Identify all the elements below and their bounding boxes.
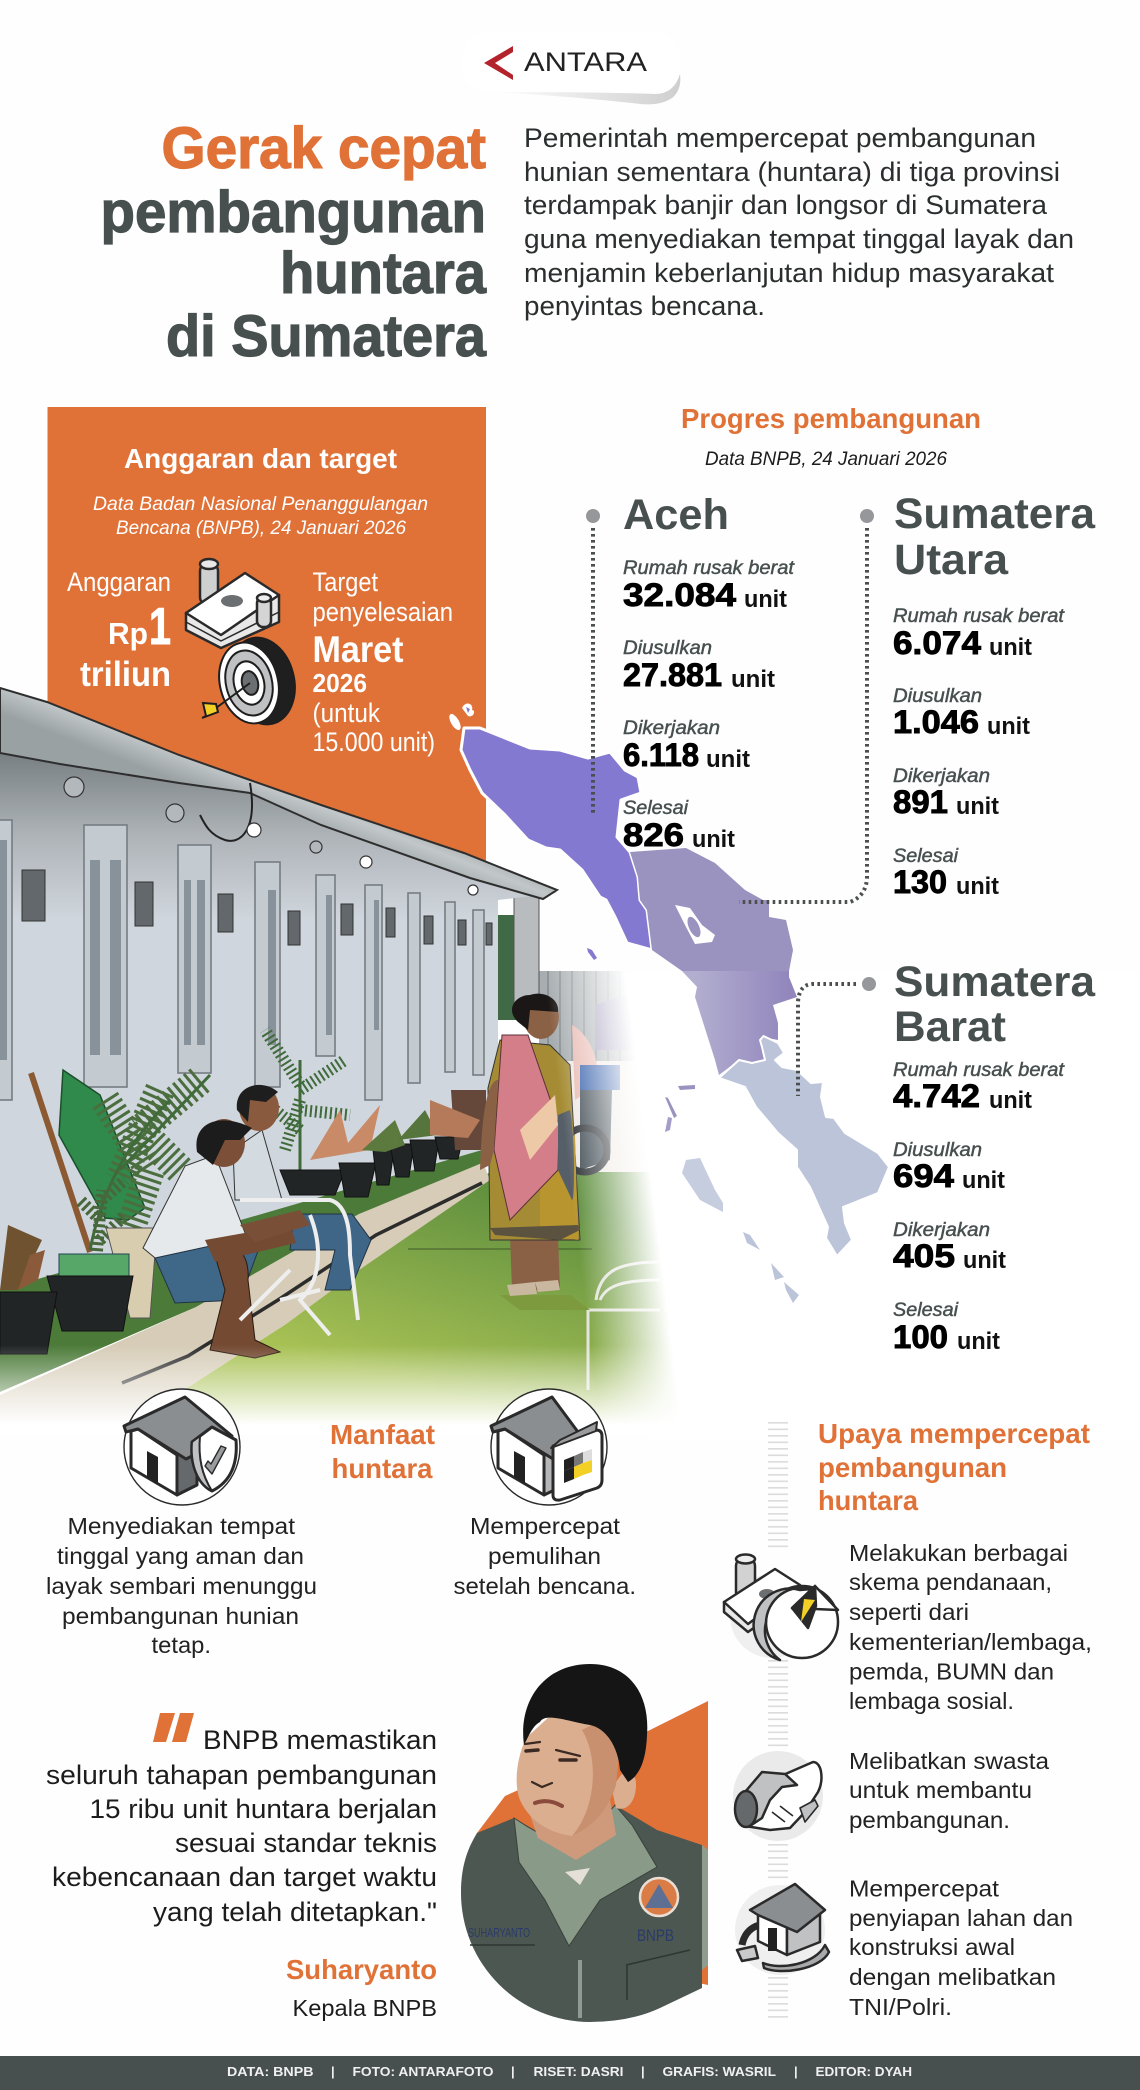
map of Sumatera — [447, 704, 889, 1303]
budget figure: Rp — [108, 616, 148, 651]
stats: Aceh: 826 — [623, 817, 684, 853]
stats: Sumatera Barat: unit — [963, 1247, 1006, 1274]
text: benefit two — [454, 1513, 636, 1599]
heading: upaya mempercepat — [818, 1418, 1090, 1516]
quote attribution: Kepala BNPB — [292, 1995, 437, 2021]
logo: ANTARA: ANTARA — [524, 47, 647, 77]
wall — [0, 745, 557, 1300]
face — [517, 1716, 636, 1836]
intro text — [524, 123, 1074, 321]
stats: Sumatera Utara: 6.074 — [893, 625, 981, 661]
stats: Sumatera Barat: 4.742 — [893, 1078, 980, 1114]
text: funding schemes: seperti dari — [849, 1599, 969, 1625]
stats: Aceh: Diusulkan — [623, 638, 712, 659]
BNPB badge — [640, 1878, 678, 1916]
white chair — [240, 1200, 358, 1335]
icon: funding money and pie — [724, 1554, 838, 1660]
text: land preparation: Mempercepat — [849, 1876, 999, 1902]
icon: house with shield — [124, 1389, 240, 1505]
hair — [523, 1664, 647, 1782]
stats: Sumatera Utara: unit — [989, 634, 1032, 661]
portrait: Suharyanto, Kepala BNPB — [461, 1664, 708, 2022]
subtitle: source: Bencana (BNPB), 24 Januari 2026 — [116, 518, 406, 539]
stats: Sumatera Barat: unit — [989, 1087, 1032, 1114]
title: huntara — [280, 241, 487, 306]
timeline ladder — [768, 1422, 788, 2018]
concrete strip — [0, 1160, 490, 1430]
BNPB label: BNPB — [637, 1926, 674, 1945]
text: benefit one: tetap. — [152, 1632, 211, 1658]
footer credits: | — [511, 2064, 515, 2079]
vest pockets — [470, 1945, 690, 2000]
budget figure — [67, 567, 171, 694]
column — [514, 890, 539, 1010]
stats: Sumatera Utara: Sumatera — [894, 490, 1096, 538]
stats: Sumatera Utara: Dikerjakan — [893, 766, 990, 787]
completion target: Maret — [312, 629, 404, 670]
heading: manfaat huntara: Manfaat — [330, 1419, 435, 1450]
text: funding schemes: lembaga sosial. — [849, 1688, 1014, 1714]
text: private sector: pembangunan. — [849, 1807, 1010, 1833]
footer credits: GRAFIS: WASRIL — [662, 2064, 776, 2079]
photo fade to white — [0, 971, 1140, 1441]
stats: Aceh: unit — [692, 826, 735, 853]
stats: Aceh: unit — [744, 586, 787, 613]
stats: Sumatera Barat: 100 — [893, 1319, 948, 1355]
connector: Sumatera Barat — [798, 977, 876, 1096]
sleeve — [702, 1845, 708, 1970]
windows and doors — [0, 820, 484, 1100]
text: benefit one: Menyediakan tempat — [68, 1513, 295, 1539]
heading: upaya mempercepat: Upaya mempercepat — [818, 1418, 1090, 1449]
neck — [530, 1800, 616, 1860]
text: funding schemes: skema pendanaan, — [849, 1569, 1052, 1595]
footer credits: | — [794, 2064, 798, 2079]
text: land preparation: penyiapan lahan dan — [849, 1905, 1073, 1931]
stats: Sumatera Barat: Dikerjakan — [893, 1220, 990, 1241]
map: Aceh province — [447, 704, 652, 960]
subtitle: source — [93, 494, 428, 539]
quote text: seluruh tahapan pembangunan — [46, 1760, 437, 1790]
completion target — [312, 567, 453, 757]
budget figure: 1 — [149, 598, 171, 656]
second chair at the right — [588, 1262, 660, 1390]
logo: ANTARA — [462, 32, 680, 104]
quote text: 15 ribu unit huntara berjalan — [90, 1794, 437, 1824]
lawn — [122, 1172, 690, 1430]
icon: house with calendar — [491, 1389, 607, 1505]
stats: Sumatera Utara: Selesai — [893, 846, 959, 867]
lamps — [64, 777, 478, 895]
text: benefit one — [46, 1513, 317, 1658]
broom and green bin — [31, 1070, 145, 1252]
stats: Aceh: 32.084 — [623, 577, 736, 613]
completion target: penyelesaian — [312, 597, 453, 627]
motorbike — [563, 1025, 620, 1172]
panel: anggaran dan target — [48, 407, 486, 877]
icon: house with construction ring — [735, 1884, 829, 1975]
budget figure: Anggaran — [67, 567, 171, 597]
heading: upaya mempercepat: pembangunan — [818, 1452, 1007, 1483]
stats: Aceh: 6.118 — [623, 737, 699, 773]
text: land preparation: dengan melibatkan — [849, 1964, 1056, 1990]
heading: progres pembangunan — [681, 403, 981, 470]
text: benefit two: setelah bencana. — [454, 1573, 636, 1599]
map: Sumatera Utara province — [630, 848, 797, 1132]
connector: Sumatera Utara — [739, 509, 874, 902]
stats: Sumatera Barat: 694 — [893, 1158, 954, 1194]
stats: Sumatera Utara: unit — [956, 793, 999, 820]
facial features — [525, 1742, 580, 1806]
text: benefit two: pemulihan — [488, 1543, 601, 1569]
footer credits: | — [641, 2064, 645, 2079]
stats: Aceh: Selesai — [623, 798, 689, 819]
text: funding schemes: kementerian/lembaga, — [849, 1629, 1092, 1655]
pots — [0, 1137, 463, 1354]
shirt — [514, 1805, 657, 1946]
text: benefit one: pembangunan hunian — [62, 1603, 299, 1629]
man in front — [143, 1119, 310, 1358]
footer credits — [0, 2056, 1140, 2090]
quote text: yang telah ditetapkan." — [153, 1897, 437, 1927]
connector: Aceh — [586, 509, 600, 816]
stats: Aceh: Dikerjakan — [623, 718, 720, 739]
stats: Aceh: Aceh — [623, 491, 729, 539]
standing woman — [480, 994, 590, 1310]
budget figure: triliun — [80, 655, 171, 694]
completion target: 2026 — [312, 668, 367, 698]
text: private sector — [849, 1748, 1050, 1833]
background fence — [539, 971, 670, 1176]
text: funding schemes: Melakukan berbagai — [849, 1540, 1068, 1566]
stats: Sumatera Utara: 891 — [893, 784, 948, 820]
stats: Sumatera Barat: unit — [957, 1328, 1000, 1355]
completion target: 15.000 unit) — [312, 727, 435, 757]
text: land preparation — [849, 1876, 1073, 2020]
stats: Sumatera Utara: unit — [956, 873, 999, 900]
intro text: guna menyediakan tempat tinggal layak dan — [524, 224, 1074, 254]
palm and small plants — [80, 1030, 350, 1275]
electricity meters — [22, 870, 492, 945]
text: benefit one: tinggal yang aman dan — [57, 1543, 304, 1569]
text: land preparation: TNI/Polri. — [849, 1994, 952, 2020]
stats: Aceh: 27.881 — [623, 657, 722, 693]
photo illustration: huntara housing with residents — [0, 688, 690, 1430]
stats: Sumatera Utara: Rumah rusak berat — [893, 606, 1065, 627]
stats: Sumatera Barat: 405 — [893, 1238, 955, 1274]
stats: Sumatera Utara: Diusulkan — [893, 686, 982, 707]
text: funding schemes: pemda, BUMN dan — [849, 1658, 1054, 1684]
footer credits: | — [331, 2064, 335, 2079]
stats: Sumatera Utara: unit — [987, 713, 1030, 740]
intro text: menjamin keberlanjutan hidup masyarakat — [524, 258, 1055, 288]
subtitle: source: Data Badan Nasional Penanggulangan — [93, 494, 428, 515]
text: benefit one: layak sembari menunggu — [46, 1573, 317, 1599]
intro text: Pemerintah mempercepat pembangunan — [524, 123, 1036, 153]
stats: Sumatera Utara: 130 — [893, 864, 947, 900]
stats: Sumatera Utara: 1.046 — [893, 704, 979, 740]
heading: manfaat huntara: huntara — [332, 1453, 433, 1484]
stats: Sumatera Barat: Diusulkan — [893, 1140, 982, 1161]
stats: Sumatera Barat — [893, 958, 1096, 1355]
stats: Aceh: Rumah rusak berat — [623, 558, 795, 579]
icon: target with arrow — [202, 631, 304, 731]
stats: Aceh: unit — [731, 666, 775, 693]
heading: progres pembangunan: Data BNPB, 24 Januari 2026 — [705, 449, 947, 470]
title — [100, 116, 487, 369]
icon: handshake — [733, 1751, 823, 1841]
map: Sumatera Barat province — [682, 1036, 889, 1303]
stats: Sumatera Barat: unit — [962, 1167, 1005, 1194]
text: benefit two: Mempercepat — [470, 1513, 620, 1539]
stats: Sumatera Utara: Utara — [894, 536, 1009, 584]
footer credits: FOTO: ANTARAFOTO — [352, 2064, 494, 2079]
quote text — [46, 1725, 437, 1927]
quote attribution — [286, 1954, 437, 2021]
green background — [498, 915, 518, 1020]
footer credits: RISET: DASRI — [534, 2064, 624, 2079]
text: private sector: Melibatkan swasta — [849, 1748, 1050, 1774]
cable — [200, 783, 252, 841]
sack and basket — [59, 1228, 157, 1318]
stats: Sumatera Utara — [893, 490, 1096, 900]
stats: Sumatera Barat: Barat — [894, 1003, 1006, 1051]
quote mark — [153, 1713, 194, 1742]
heading: upaya mempercepat: huntara — [818, 1485, 918, 1516]
title: pembangunan — [100, 180, 486, 245]
title: Gerak cepat — [162, 116, 486, 181]
footer credits: DATA: BNPB — [227, 2064, 314, 2079]
completion target: (untuk — [312, 698, 380, 728]
zipper — [578, 1960, 582, 2018]
orange backdrop — [470, 1701, 708, 1985]
vest — [461, 1805, 702, 2022]
heading: anggaran dan target: Anggaran dan target — [124, 443, 397, 474]
heading: manfaat huntara — [330, 1419, 435, 1484]
completion target: Target — [312, 567, 378, 597]
icon: money stack — [186, 559, 279, 648]
grass strip — [0, 1150, 482, 1392]
footer credits: EDITOR: DYAH — [816, 2064, 912, 2079]
quote text: sesuai standar teknis — [175, 1828, 437, 1858]
quote text: kebencanaan dan target waktu — [52, 1862, 437, 1892]
intro text: terdampak banjir dan longsor di Sumatera — [524, 190, 1048, 220]
stats: Aceh: unit — [706, 746, 750, 773]
intro text: hunian sementara (huntara) di tiga provinsi — [524, 157, 1060, 187]
text: private sector: untuk membantu — [849, 1777, 1032, 1803]
foliage on pots — [0, 1100, 480, 1290]
text: land preparation: konstruksi awal — [849, 1934, 1015, 1960]
roof — [0, 688, 557, 899]
stats: Sumatera Barat: Rumah rusak berat — [893, 1060, 1065, 1081]
text: funding schemes — [849, 1540, 1092, 1714]
intro text: penyintas bencana. — [524, 291, 765, 321]
quote attribution: Suharyanto — [286, 1954, 437, 1985]
stats: Aceh — [623, 491, 795, 853]
title: di Sumatera — [166, 304, 487, 369]
stats: Sumatera Barat: Selesai — [893, 1300, 959, 1321]
heading: progres pembangunan: Progres pembangunan — [681, 403, 981, 434]
name patch: SUHARYANTO — [468, 1925, 530, 1940]
stats: Sumatera Barat: Sumatera — [894, 958, 1096, 1006]
man behind — [233, 1085, 371, 1290]
quote text: BNPB memastikan — [203, 1725, 437, 1755]
